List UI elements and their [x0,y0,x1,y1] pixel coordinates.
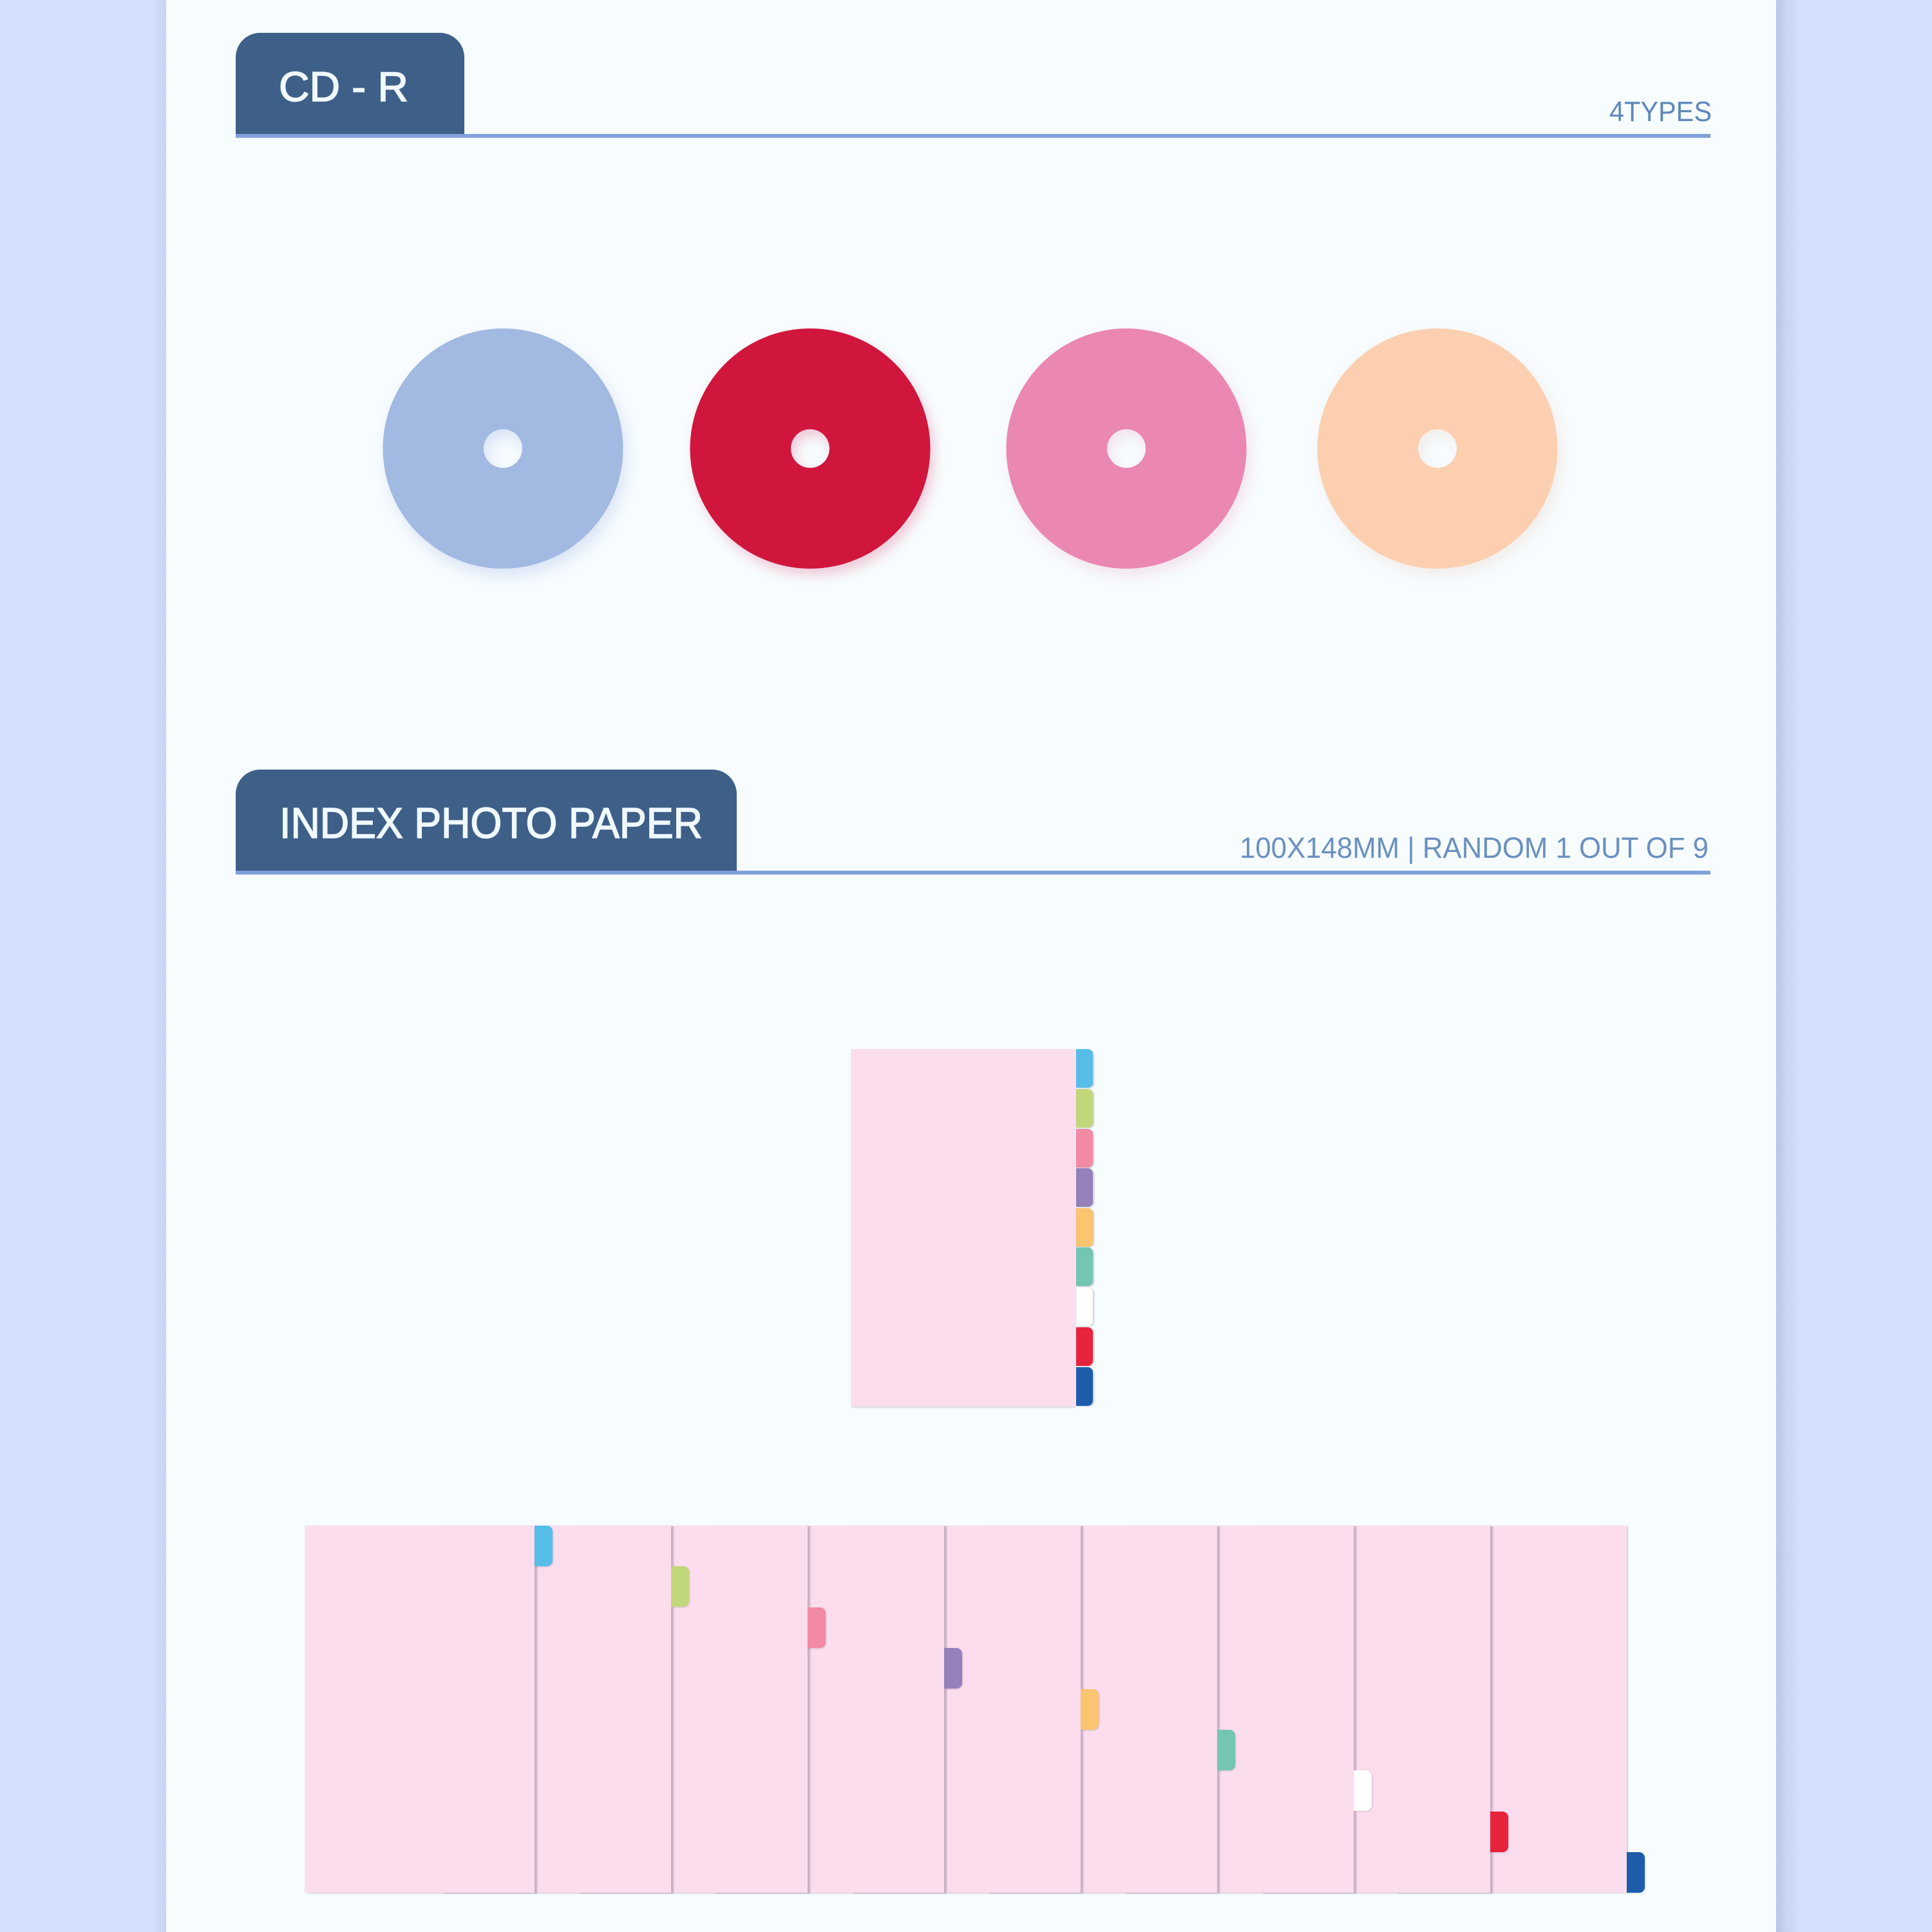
index tab: rose [1076,1129,1093,1168]
index tab: red [1076,1327,1093,1366]
heading text: CD - R: CD - R [279,63,408,110]
sheet 3 with rose tab [578,1526,808,1893]
illustration: single paper with nine index tabs [851,1049,1095,1408]
label: paper size and random note: 100X148MM | RANDOM 1 OUT OF 9 [1240,831,1709,864]
disc: blue [383,328,623,569]
heading tab: Index Photo Paper [236,770,737,871]
sheet 6 with teal tab [987,1526,1217,1893]
index tab: lime [1076,1089,1093,1128]
section: Index Photo Paper header [236,770,1710,875]
sheet 1 with sky blue tab [305,1526,535,1893]
sheet 5 with orange tab [851,1526,1081,1893]
heading tab: CD - R [236,33,464,134]
disc: peach [1318,328,1557,569]
sheet 9 with navy tab [1397,1526,1627,1893]
chart: four CD-R discs [383,328,1564,581]
paper sheet [851,1049,1076,1406]
disc: red [690,328,930,569]
index tab: sky blue [1076,1049,1093,1088]
sheet 4 with purple tab [714,1526,944,1893]
divider rule [236,871,1710,875]
disc: pink [1007,328,1247,569]
index tab: orange [1076,1208,1093,1247]
background shadow left of panel [152,0,166,1932]
sheet 8 with red tab [1260,1526,1490,1893]
sheet 2 with lime tab [441,1526,671,1893]
section: CD-R header [236,33,1710,138]
background shadow right of panel [1776,0,1801,1932]
index tab: navy [1076,1367,1093,1406]
illustration: fanned stack of nine index papers [305,1525,1646,1895]
index tab: teal [1076,1247,1093,1286]
sheet 7 with white tab [1124,1526,1354,1893]
index tab: white [1076,1287,1093,1326]
divider rule [236,134,1710,138]
index tab: purple [1076,1168,1093,1207]
label: 4 types: 4TYPES [1609,96,1712,128]
